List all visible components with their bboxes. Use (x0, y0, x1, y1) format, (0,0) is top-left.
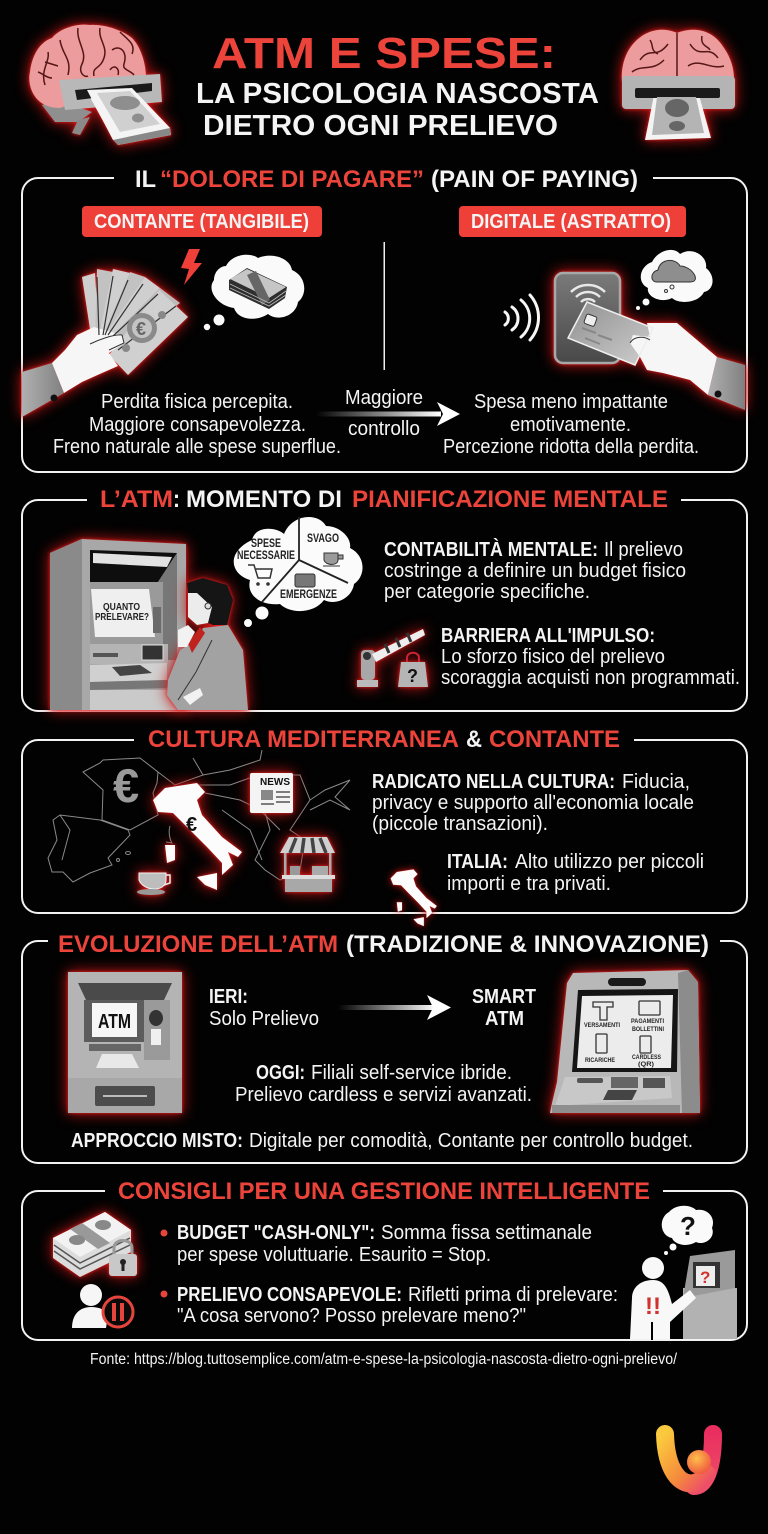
badge: contante (82, 206, 322, 237)
text: prelievo consapevole: Rifletti prima di prelevare: (408, 1284, 618, 1306)
heading: pianificazione mentale: L’ATM (100, 486, 173, 513)
logo (665, 1434, 713, 1486)
icon: barrier and shopping bag: ? (407, 666, 418, 686)
text: budget cash-only: Somma fissa settimanale (381, 1222, 592, 1244)
illustration: person thinking at ATM (630, 1206, 737, 1340)
icon: thought cloud with digital cloud (636, 250, 713, 310)
bullet (160, 1290, 168, 1298)
text: contante: Maggiore consapevolezza. (89, 414, 306, 436)
text: oggi: Prelievo cardless e servizi avanzati. (235, 1084, 532, 1106)
icon: brain with cash slot, right (622, 30, 735, 140)
map: Italy highlighted: € (186, 814, 197, 836)
text: radicato nella cultura: Fiducia, (622, 771, 690, 793)
heading: cultura mediterranea: CULTURA MEDITERRANEA (148, 726, 459, 753)
text: oggi: OGGI: (256, 1062, 305, 1084)
text: contabilita mentale: costringe a definire un budget fisico (384, 560, 686, 582)
icon: cash stack with padlock (53, 1212, 137, 1277)
text: approccio misto: APPROCCIO MISTO: (71, 1130, 243, 1152)
screen menu labels: RICARICHE (585, 1057, 616, 1064)
text: barriera all'impulso: Lo sforzo fisico del prelievo (441, 646, 665, 668)
text: radicato nella cultura: privacy e supporto all'economia locale (372, 792, 694, 814)
title: ATM E SPESE: (212, 29, 556, 78)
illustration: person thinking at ATM: !! (645, 1293, 661, 1320)
icon: payment terminal and card (555, 273, 745, 410)
text: budget cash-only: BUDGET "CASH-ONLY": (177, 1222, 375, 1244)
text: italia: Alto utilizzo per piccoli (515, 851, 704, 873)
header (29, 25, 735, 145)
text: smart ATM: SMART (472, 986, 536, 1008)
illustration: person thinking at ATM: ? (700, 1268, 710, 1287)
badge: digitale (459, 206, 686, 237)
text: contante: Freno naturale alle spese superflue. (53, 436, 341, 458)
icon: lightning bolt (181, 249, 202, 285)
icon: newspaper (250, 773, 293, 813)
heading: evoluzione dell'atm (58, 931, 709, 958)
text: ieri: IERI: (209, 986, 248, 1008)
heading: evoluzione dell'atm: EVOLUZIONE DELL’ATM (58, 931, 338, 958)
label: spese necessarie: SPESE (251, 538, 281, 550)
icon: newspaper: NEWS (260, 776, 290, 788)
label: spese necessarie (237, 538, 295, 562)
text: barriera all'impulso: scoraggia acquisti non programmati. (441, 667, 740, 689)
screen menu labels: VERSAMENTI (584, 1022, 620, 1029)
icon: small Italy (391, 869, 437, 926)
label: emergenze: EMERGENZE (280, 589, 337, 601)
label: svago: SVAGO (307, 533, 339, 545)
text: approccio misto (71, 1130, 693, 1152)
text: prelievo consapevole (177, 1284, 618, 1327)
text: contante: Perdita fisica percepita. (101, 391, 293, 413)
text: prelievo consapevole: "A cosa servono? Posso prelevare meno?" (177, 1305, 526, 1327)
icon: hand holding cash fan: € (136, 319, 146, 339)
arrow: maggiore controllo: controllo (348, 418, 420, 440)
ATM screen: PRELEVARE? (95, 612, 149, 623)
bullet (160, 1230, 168, 1236)
icon: contactless waves (505, 295, 539, 340)
badge: contante: CONTANTE (TANGIBILE) (94, 211, 309, 233)
heading: pianificazione mentale: : (173, 486, 180, 513)
heading: dolore di pagare (135, 166, 638, 193)
screen menu labels: BOLLETTINI (632, 1026, 664, 1033)
heading: cultura mediterranea: & (466, 726, 482, 753)
text: contabilita mentale: CONTABILITÀ MENTALE: (384, 538, 598, 561)
text: italia: ITALIA: (447, 851, 508, 873)
icon: thought cloud with money stack (204, 255, 304, 330)
screen menu labels: (QR) (638, 1061, 654, 1068)
illustration: person thinking at ATM: ? (680, 1211, 696, 1241)
text: budget cash-only: per spese voluttuarie. Esaurito = Stop. (177, 1244, 491, 1266)
text: barriera all'impulso (441, 625, 740, 689)
ATM screen: QUANTO (103, 602, 140, 613)
text: barriera all'impulso: BARRIERA ALL'IMPULSO: (441, 625, 655, 647)
heading: pianificazione mentale (100, 486, 668, 513)
text: contante (53, 391, 341, 458)
text: smart ATM (472, 986, 536, 1030)
arrow: maggiore controllo (316, 387, 460, 440)
illustration: person at ATM (167, 578, 248, 710)
text: contabilita mentale: per categorie specifiche. (384, 581, 590, 603)
title (196, 29, 599, 142)
arrow: from yesterday to smart ATM (338, 995, 451, 1020)
illustration: ATM machine (50, 539, 186, 710)
text: approccio misto: Digitale per comodità, Contante per controllo budget. (249, 1130, 693, 1152)
panel: ATM evolution (22, 931, 747, 1163)
panel: mental planning (22, 486, 747, 711)
icon: person with pause (72, 1284, 133, 1328)
panel: smart management tips (22, 1178, 747, 1340)
heading: evoluzione dell'atm: (TRADIZIONE & INNOVAZIONE) (346, 931, 709, 958)
screen menu labels (584, 1018, 664, 1068)
text: ieri (209, 986, 319, 1030)
text: radicato nella cultura (372, 771, 694, 835)
title: DIETRO OGNI PRELIEVO (203, 110, 558, 142)
text: oggi: Filiali self-service ibride. (311, 1062, 512, 1084)
screen menu labels: PAGAMENTI (631, 1018, 664, 1025)
ATM screen label (92, 1003, 137, 1037)
map: Italy highlighted (153, 783, 242, 890)
icon: market stall (280, 837, 335, 892)
text: digitale: emotivamente. (510, 414, 631, 436)
label: spese necessarie: NECESSARIE (237, 550, 295, 562)
map: mediterranean countries (48, 750, 350, 882)
illustration: smart ATM (550, 970, 700, 1113)
heading: dolore di pagare: (PAIN OF PAYING) (431, 166, 638, 193)
heading: pianificazione mentale: MOMENTO DI (186, 486, 342, 513)
heading: cultura mediterranea (148, 726, 620, 753)
text: digitale: Percezione ridotta della perdita. (443, 436, 699, 458)
heading: dolore di pagare: “DOLORE DI PAGARE” (160, 166, 424, 193)
panel: pain of paying (22, 166, 747, 472)
text: contabilita mentale: Il prelievo (604, 539, 683, 561)
icon: brain with cash slot, left (29, 25, 171, 145)
icon: euro symbol: € (113, 759, 139, 812)
text: oggi (235, 1062, 532, 1106)
text: radicato nella cultura: (piccole transazioni). (372, 813, 548, 835)
icon: coffee cup (137, 873, 170, 895)
text: contabilita mentale (384, 538, 686, 603)
text: radicato nella cultura: RADICATO NELLA CULTURA: (372, 771, 615, 793)
text: italia: importi e tra privati. (447, 873, 611, 895)
text: budget cash-only (177, 1222, 592, 1266)
illustration: traditional ATM (68, 972, 182, 1113)
arrow: maggiore controllo: Maggiore (345, 387, 423, 409)
panel: mediterranean culture (22, 726, 747, 926)
heading: consigli: CONSIGLI PER UNA GESTIONE INTELLIGENTE (118, 1178, 650, 1205)
text: smart ATM: ATM (485, 1008, 524, 1030)
text: italia (447, 851, 704, 895)
icon: thought cloud with budget categories (234, 517, 363, 627)
source line: Fonte: https://blog.tuttosemplice.com/atm-e-spese-la-psicologia-nascosta-dietro-ogni-prelievo/ (90, 1351, 678, 1368)
badge: digitale: DIGITALE (ASTRATTO) (471, 211, 671, 233)
ATM screen label: ATM (98, 1011, 131, 1033)
icon: hand holding cash fan (22, 269, 188, 417)
text: digitale: Spesa meno impattante (474, 391, 668, 413)
title: LA PSICOLOGIA NASCOSTA (196, 78, 599, 110)
text: ieri: Solo Prelievo (209, 1008, 319, 1030)
heading: pianificazione mentale: PIANIFICAZIONE MENTALE (352, 486, 668, 513)
heading: cultura mediterranea: CONTANTE (489, 726, 620, 753)
ATM screen (91, 589, 155, 637)
text: digitale (443, 391, 699, 458)
heading: dolore di pagare: IL (135, 166, 156, 193)
icon: barrier and shopping bag (357, 629, 428, 687)
text: prelievo consapevole: PRELIEVO CONSAPEVOLE: (177, 1284, 402, 1306)
screen menu labels: CARDLESS (632, 1054, 662, 1061)
